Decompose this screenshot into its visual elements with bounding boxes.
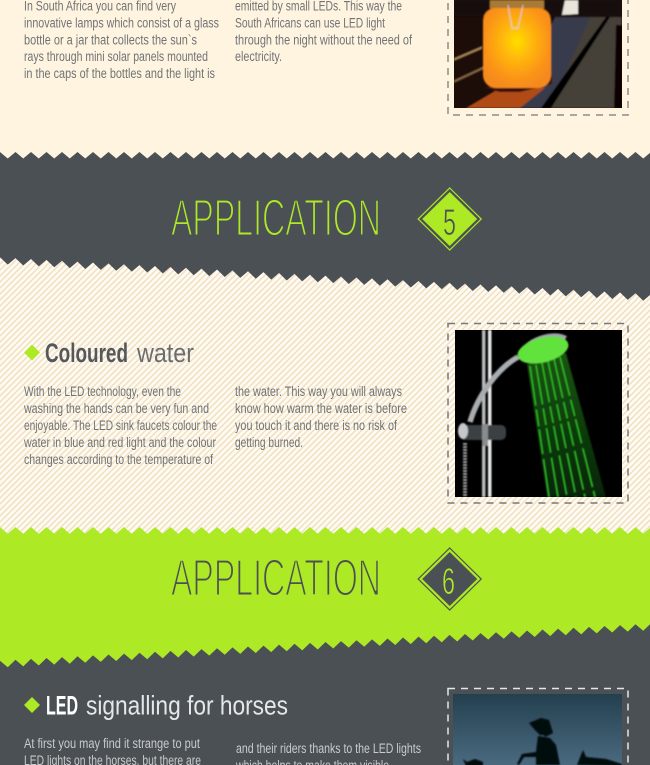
text block: coloured water, left column bbox=[23, 384, 217, 467]
heading: application: APPLICATION bbox=[171, 550, 381, 608]
text block: coloured water, right column bbox=[235, 384, 407, 450]
text block: coloured water, right column: the water. This way you will always bbox=[235, 384, 402, 399]
text block: coloured water, left column: With the LED technology, even the bbox=[24, 384, 181, 399]
heading: coloured water bbox=[24, 338, 194, 368]
text block: coloured water, right column: getting burned. bbox=[235, 435, 303, 450]
photo: glowing solar jar bbox=[448, 0, 628, 115]
text block: horses, right column bbox=[235, 741, 421, 765]
text block: coloured water, left column: water in blue and red light and the colour bbox=[23, 435, 216, 450]
text block: solar lamps, left column: bottle or a jar that collects the sun`s bbox=[24, 32, 197, 48]
text block: coloured water, right column: you touch it and there is no risk of bbox=[235, 418, 397, 433]
text block: solar lamps, right column bbox=[235, 0, 412, 64]
title band: application 5 bbox=[171, 188, 481, 250]
photo: rider on horseback at dusk bbox=[448, 688, 628, 765]
icon: number 6 diamond: 6 bbox=[442, 561, 455, 602]
text block: horses, left column bbox=[24, 736, 201, 765]
icon: green bullet diamond bbox=[24, 344, 40, 360]
title band: application 6 bbox=[171, 548, 481, 610]
icon: number 5 diamond: 5 bbox=[443, 202, 456, 243]
text block: solar lamps, right column: electricity. bbox=[235, 49, 282, 64]
text block: solar lamps, left column: innovative lamps which consist of a glass bbox=[24, 16, 219, 30]
panel: green band with zigzag upper edge bbox=[0, 527, 650, 700]
text block: coloured water, right column: know how warm the water is before bbox=[235, 401, 407, 416]
text block: solar lamps, left column: rays through mini solar panels mounted bbox=[24, 49, 208, 64]
text block: coloured water, left column: washing the hands can be very fun and bbox=[23, 401, 209, 416]
text block: horses, right column: and their riders thanks to the LED lights bbox=[236, 741, 421, 756]
heading: coloured water: water bbox=[136, 338, 194, 368]
panel: hatched section with slanted zigzag upper edge bbox=[0, 257, 650, 545]
panel: dark lower section with slanted zigzag upper edge bbox=[0, 620, 650, 765]
heading: LED signalling for horses: signalling for horses bbox=[86, 690, 288, 720]
text block: coloured water, left column: changes according to the temperature of bbox=[24, 452, 213, 467]
text block: coloured water, left column: enjoyable. The LED sink faucets colour the bbox=[24, 418, 217, 433]
heading: LED signalling for horses bbox=[24, 690, 288, 720]
icon: number 5 diamond bbox=[418, 188, 481, 250]
text block: solar lamps, left column bbox=[24, 0, 219, 81]
heading: LED signalling for horses: LED bbox=[46, 690, 78, 720]
photo: LED shower head bbox=[448, 324, 628, 503]
icon: number 6 diamond bbox=[418, 548, 481, 610]
text block: solar lamps, right column: through the night without the need of bbox=[235, 32, 412, 48]
icon: green bullet diamond bbox=[24, 697, 40, 713]
text block: horses, left column: At first you may find it strange to put bbox=[24, 736, 200, 751]
heading: application: APPLICATION bbox=[171, 190, 381, 248]
heading: coloured water: Coloured bbox=[45, 338, 128, 368]
text block: solar lamps, right column: South Africans can use LED light bbox=[235, 16, 385, 30]
panel: cream section with zigzag lower edge bbox=[0, 0, 650, 158]
text block: solar lamps, left column: in the caps of the bottles and the light is bbox=[24, 66, 215, 81]
